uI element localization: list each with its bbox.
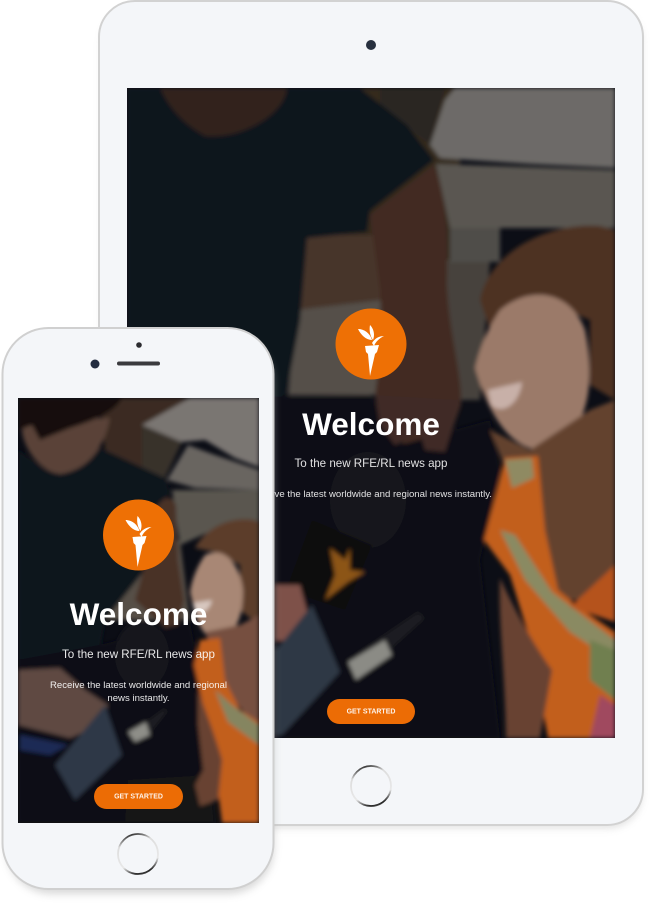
connector [128, 722, 150, 742]
girl's hair [195, 519, 259, 625]
lower dark trousers [274, 394, 502, 684]
background wall [98, 398, 190, 471]
man's shirt [128, 88, 434, 396]
forearm and hand [18, 668, 108, 738]
tablet description: Receive the latest worldwide and regional news instantly. [250, 489, 492, 500]
man's arm [370, 165, 461, 450]
man's shirt [18, 448, 170, 670]
microphone cover [330, 452, 406, 548]
lower dark [18, 624, 204, 798]
phone description: Receive the latest worldwide and regional [50, 680, 227, 691]
orange chest panel [570, 565, 615, 622]
man's face [22, 418, 110, 474]
phone speaker [117, 362, 160, 366]
orange dress strap [484, 456, 615, 738]
phone subtitle: To the new RFE/RL news app [62, 648, 215, 661]
connector [348, 640, 392, 680]
phone heading: Welcome [70, 596, 207, 632]
phone logo [103, 500, 174, 570]
ground [125, 775, 215, 823]
tablet logo [336, 308, 406, 380]
girl's face [190, 552, 243, 640]
girl's arm [500, 578, 552, 738]
phone sensor [136, 342, 142, 348]
recorder [55, 705, 122, 800]
girl's neck and chest [490, 400, 615, 600]
phone button: GET STARTED [114, 794, 163, 800]
man's hair [18, 398, 122, 440]
phone camera [90, 360, 100, 368]
man's arm and hand [135, 498, 184, 628]
girl's arm [195, 690, 222, 806]
background wall [338, 88, 462, 261]
phone description [50, 680, 227, 704]
hand on recorder [276, 585, 308, 642]
man's chin [160, 88, 287, 136]
tablet subtitle: To the new RFE/RL news app [295, 457, 447, 470]
tablet [99, 1, 643, 828]
sacks [142, 398, 259, 467]
tablet screen photo [127, 88, 615, 738]
phone button [94, 784, 183, 809]
phone [2, 328, 274, 894]
sacks [430, 88, 615, 168]
girl's face [475, 295, 589, 451]
tablet heading: Welcome [302, 406, 440, 442]
tablet home button [351, 766, 391, 806]
orange dress [194, 638, 259, 823]
tablet button: GET STARTED [347, 708, 395, 716]
tablet body [99, 1, 643, 828]
rubble [288, 300, 382, 395]
connector cable [354, 612, 425, 653]
phone screen photo [18, 398, 259, 823]
girl's mouth [488, 382, 522, 409]
fingers overlap [373, 404, 454, 455]
girl's neck and chest [205, 615, 259, 730]
girl's hair [480, 226, 615, 400]
phone body [2, 328, 274, 894]
girl's mouth [193, 600, 212, 613]
tablet camera [366, 40, 376, 50]
dark sack shadow [142, 425, 182, 478]
phone home button [118, 834, 158, 874]
blue shirt cuff [20, 735, 68, 755]
phone description: news instantly. [107, 693, 170, 704]
tablet button [327, 699, 415, 724]
recorder [276, 605, 340, 735]
rubble [100, 540, 190, 620]
microphone [115, 621, 169, 689]
dark pouch and logo [286, 520, 372, 610]
